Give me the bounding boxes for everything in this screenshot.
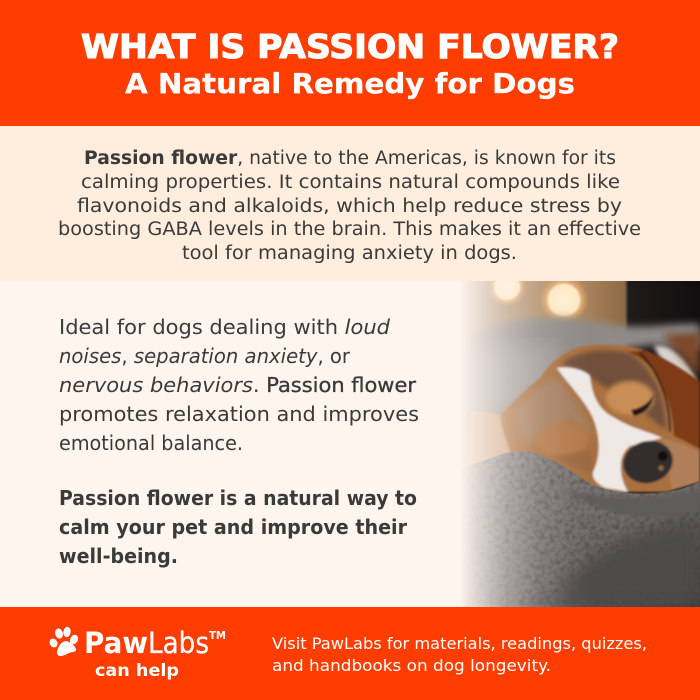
- text block: ideal uses: [59, 315, 419, 455]
- panel: introduction: flavonoids and alkaloids, which help reduce stress by: [77, 196, 622, 217]
- footer call to action: Visit PawLabs for materials, readings, quizzes,: [272, 634, 647, 653]
- footer call to action: and handbooks on dog longevity.: [272, 656, 551, 675]
- muzzle: [662, 438, 700, 490]
- photo: sleeping beagle: [440, 267, 700, 607]
- dog: [468, 345, 700, 492]
- panel: introduction: tool for managing anxiety in dogs.: [182, 243, 517, 264]
- text block: ideal uses: noises, separation anxiety, or: [59, 344, 351, 368]
- page background: [0, 281, 700, 607]
- logo: PawLabs: Paw: [84, 626, 148, 660]
- dog head: [498, 345, 700, 492]
- title: WHAT IS PASSION FLOWER?: [81, 27, 619, 66]
- pillow behind: [460, 317, 700, 430]
- crown shading: [560, 351, 666, 430]
- text block: ideal uses: Ideal for dogs dealing with loud: [59, 315, 391, 339]
- far ear: [627, 350, 700, 449]
- panel: introduction: calming properties. It contains natural compounds like: [81, 172, 620, 193]
- subtitle: A Natural Remedy for Dogs: [125, 67, 575, 100]
- white blaze: [557, 367, 662, 492]
- text block: conclusion: Passion flower is a natural way to: [59, 486, 417, 510]
- blanket: [440, 451, 700, 607]
- tagline: can help: can help: [95, 661, 179, 681]
- text block: ideal uses: promotes relaxation and improves: [59, 402, 419, 426]
- footer call to action: [272, 634, 647, 675]
- near ear: [468, 411, 512, 480]
- text block: ideal uses: emotional balance.: [59, 431, 243, 455]
- logo: PawLabs: [84, 626, 226, 660]
- text block: ideal uses: nervous behaviors. Passion flower: [59, 373, 417, 397]
- panel: introduction: Passion flower, native to the Americas, is known for its: [84, 148, 616, 169]
- text block: conclusion: well-being.: [59, 544, 178, 568]
- panel: introduction: boosting GABA levels in the brain. This makes it an effective: [58, 219, 641, 240]
- text block: conclusion: calm your pet and improve their: [59, 515, 407, 539]
- logo: PawLabs: Labs: [148, 626, 209, 660]
- logo: PawLabs: TM: [209, 629, 226, 642]
- title banner: [0, 0, 700, 126]
- footer banner: [0, 607, 700, 700]
- text block: conclusion: [59, 486, 417, 568]
- panel: introduction: [0, 126, 700, 281]
- nose: [618, 435, 678, 489]
- icon: paw: [48, 626, 80, 656]
